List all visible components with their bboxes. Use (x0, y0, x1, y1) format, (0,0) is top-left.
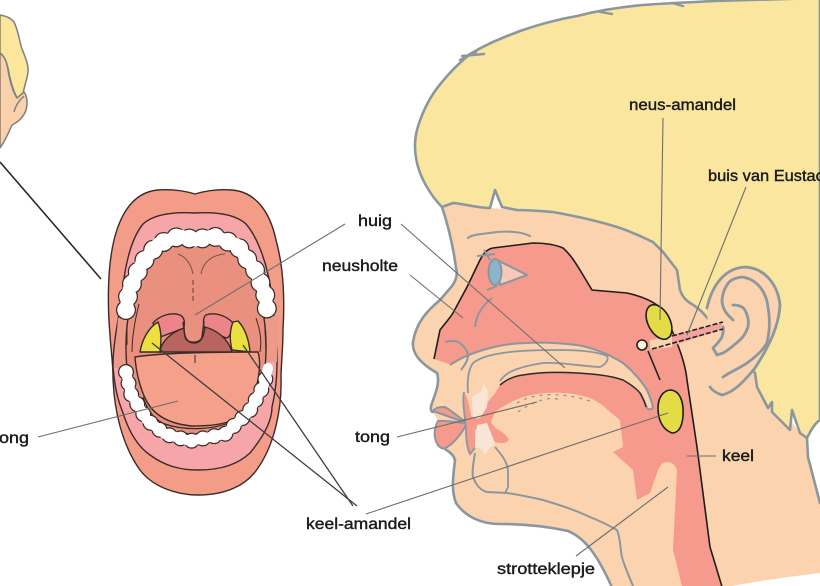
nasal tonsil (641, 301, 677, 343)
lower inner gum line (143, 393, 257, 429)
large head side profile (413, 0, 820, 586)
lower teeth (126, 368, 268, 441)
back of throat (160, 327, 232, 352)
Eustachian tube (637, 322, 723, 352)
tongue dots (517, 395, 590, 412)
hair (415, 0, 820, 438)
skin of face and neck (413, 203, 820, 586)
pointer lines (38, 118, 746, 556)
eyebrow (468, 232, 530, 238)
neck back outline (807, 438, 820, 503)
throat tonsils (140, 321, 250, 352)
label: neus-amandel: neus-amandel (629, 97, 736, 114)
gum outline (463, 392, 475, 454)
label: keel: keel (722, 448, 754, 465)
hair tufts (460, 3, 683, 60)
tongue (135, 352, 260, 426)
throat tonsil (658, 390, 683, 433)
uvula (183, 321, 204, 342)
palate inner contour (468, 350, 608, 393)
label: neusholte: neusholte (322, 258, 398, 275)
label: keel-amandel: keel-amandel (306, 516, 411, 533)
label: huig: huig (358, 213, 392, 230)
nostril (445, 341, 468, 370)
label: tong right: tong (355, 429, 390, 446)
nasal cavity and throat (434, 243, 723, 586)
upper tongue line (500, 372, 646, 407)
mid cheek shading (114, 316, 277, 368)
outer lips (108, 190, 284, 495)
cavity outline, back of the nose and throat (434, 243, 723, 586)
palate details (178, 254, 225, 274)
mouth cavity and palate (126, 244, 266, 434)
tube cartilage line (648, 351, 660, 380)
pointer line from small head to mouth (0, 162, 101, 279)
open mouth diagram (108, 190, 284, 495)
palate upper grey contour (450, 343, 653, 409)
gum and front of the tongue (463, 383, 512, 454)
inner lip ring (113, 213, 277, 470)
neck front contour (495, 447, 508, 493)
hard and soft palate (450, 343, 653, 412)
upper and lower front teeth (472, 383, 495, 455)
palatal arches (153, 314, 233, 338)
small head: cropped face with hair and ear (0, 15, 28, 148)
lips (433, 407, 467, 449)
upper teeth (126, 236, 267, 310)
eye (475, 250, 527, 327)
pointer lines to throat tonsils (152, 343, 357, 506)
ear (707, 267, 780, 395)
label: strotteklepje: strotteklepje (497, 561, 595, 578)
face outline (413, 207, 614, 586)
jaw contour (473, 453, 633, 586)
